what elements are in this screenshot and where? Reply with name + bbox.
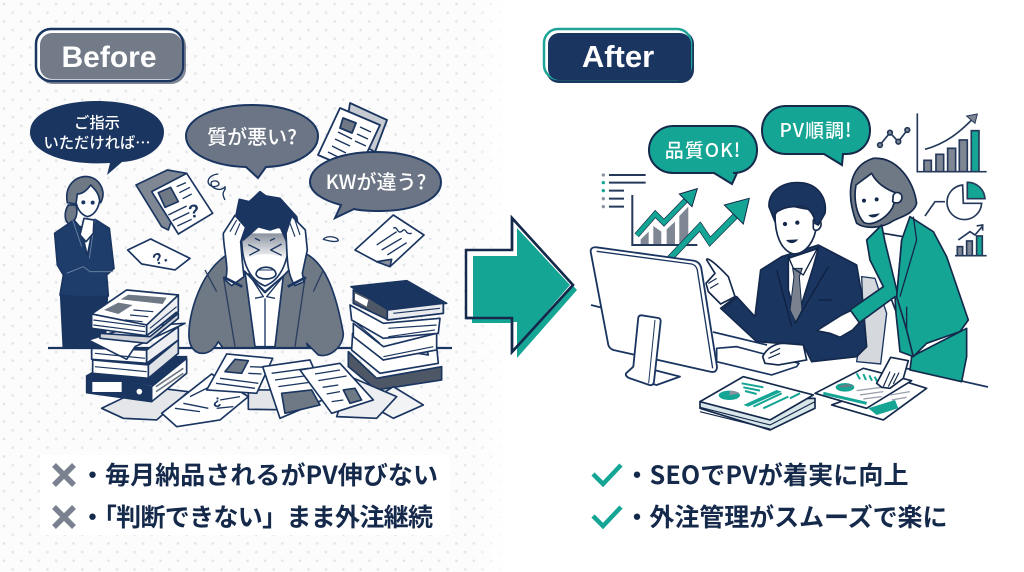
illustration: monitor [591,247,717,385]
icon: line chart nodes [878,128,910,147]
icon: cross [54,507,74,527]
badge: After: After [582,39,654,74]
illustration: woman in teal suit [817,158,968,382]
illustration: flying document with question mark: ? [187,200,201,222]
problem 2: ・「判断できない」まま外注継続 [80,498,433,534]
illustration: report stack [700,377,815,430]
icon: check [593,507,621,526]
speech bubble: instructions [30,101,164,175]
problem 1: ・毎月納品されるがPV伸びない [80,456,438,492]
illustration: stressed man [189,192,343,356]
badge: After [544,29,694,83]
benefit 2: ・外注管理がスムーズで楽に [624,498,948,534]
speech bubble: keyword [310,152,441,218]
list: problems [40,455,450,535]
chart: bar chart with trend [917,113,987,172]
panel: before [30,29,452,535]
illustration: flying document with question mark: ?. [151,248,170,269]
illustration: left stack of documents [87,290,188,420]
icon: list lines [602,173,646,208]
badge: Before [36,29,186,84]
benefit 1: ・SEOでPVが着実に向上 [624,456,908,492]
illustration: flying document with question mark [128,170,225,270]
illustration: office desk line [591,305,988,387]
illustration: floating document top right [318,103,387,172]
chart: mini bars [955,225,987,256]
icon: check [593,465,621,484]
speech bubble: quality OK [649,126,757,184]
illustration: man in navy suit [706,183,867,365]
panel: after [544,29,988,534]
speech bubble: quality: 質が悪い? [207,121,297,150]
illustration: right stack of binders [348,281,447,390]
speech bubble: PV going well [762,106,870,165]
illustration: report sheets on desk [815,357,927,420]
speech bubble: instructions: いただければ… [43,131,151,153]
illustration: scattered papers on desk [162,354,423,427]
speech bubble: keyword: KWが違う? [326,166,426,195]
illustration: keyboard [717,347,799,375]
illustration: woman thinking [55,176,114,347]
arrow: before to after [466,218,577,358]
illustration: desk line [48,347,452,349]
chart: growth behind monitor [632,189,749,258]
speech bubble: quality [186,105,318,178]
speech bubble: quality OK: 品質OK! [665,136,741,163]
list: benefits [593,456,948,534]
speech bubble: instructions: ご指示 [74,111,120,133]
speech bubble: PV going well: PV順調! [779,116,853,143]
illustration: chair [857,277,887,364]
illustration: scattered papers on desk: ¿ [213,392,222,408]
badge: Before: Before [61,41,157,74]
illustration: curled note [355,215,424,267]
icon: cross [54,465,74,485]
chart: pie [925,182,985,220]
